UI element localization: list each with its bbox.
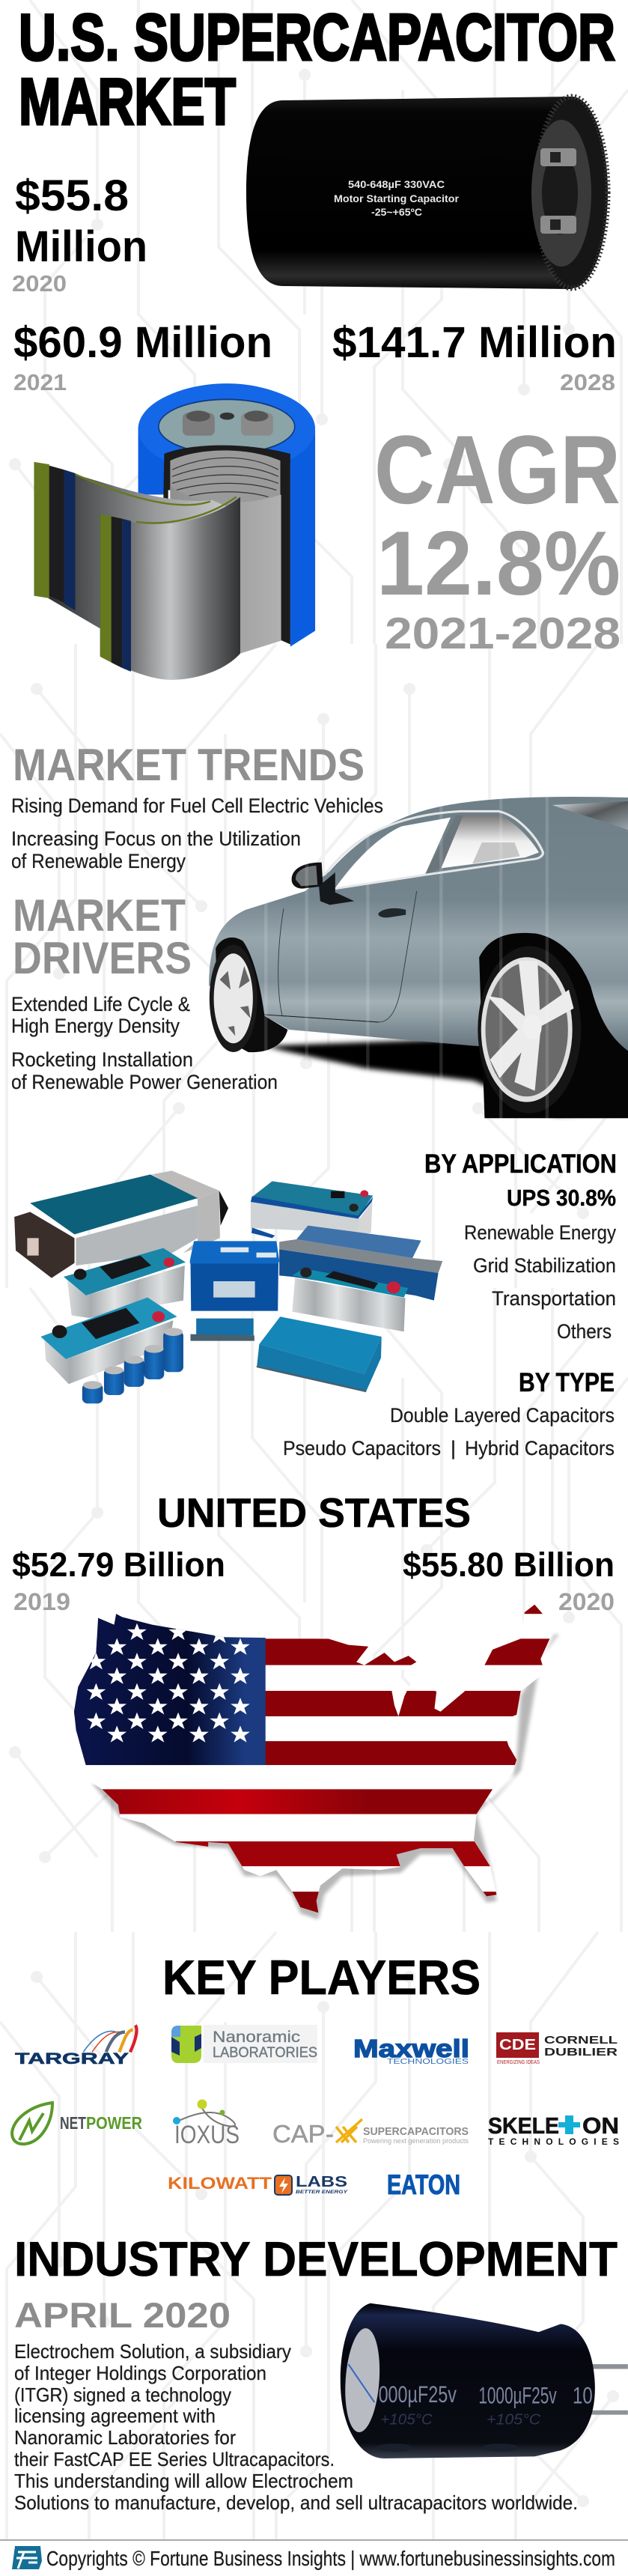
stat: 2028 value: 2028	[560, 369, 615, 395]
heading: market drivers	[13, 890, 192, 983]
stat: 2020 value	[12, 171, 147, 297]
stat: 2019 market: 2019	[13, 1588, 70, 1615]
stat: 2019 market: $52.79 Billion	[12, 1546, 225, 1584]
title: MARKET	[19, 64, 236, 139]
segment: by application: Transportation	[492, 1287, 616, 1310]
stat: 2028 value: $141.7 Million	[332, 318, 617, 367]
stat: 2020 value: $55.8	[15, 171, 129, 220]
text block: industry development: licensing agreement with	[14, 2405, 216, 2427]
list: market drivers	[11, 993, 278, 1093]
heading: market drivers: MARKET	[13, 890, 186, 941]
segment: by type: BY TYPE	[519, 1368, 615, 1397]
logo: Kilowatt Labs: KILOWATT	[168, 2174, 272, 2193]
stat: 2019 market	[12, 1546, 225, 1615]
text block: industry development: (ITGR) signed a technology	[14, 2384, 231, 2406]
capacitor markings: +105°C	[487, 2411, 541, 2428]
logo: Cornell Dubilier: DUBILIER	[544, 2046, 618, 2059]
image: grey coupe car	[209, 786, 628, 1146]
image: supercapacitor cutaway	[34, 383, 315, 680]
logo: Targray: TARGRAY	[15, 2050, 129, 2068]
stat: 2021 value: $60.9 Million	[13, 318, 272, 367]
segment: by application	[424, 1149, 617, 1343]
logo: Cornell Dubilier: CORNELL	[544, 2034, 618, 2047]
stat: 2021 value: 2021	[13, 369, 67, 395]
logo: Nanoramic Laboratories: LABORATORIES	[213, 2045, 317, 2061]
stat: 2020 market: 2020	[558, 1588, 615, 1615]
logo: Skeleton Technologies: TECHNOLOGIES	[488, 2136, 619, 2147]
list: market drivers: Rocketing Installation	[11, 1048, 193, 1071]
stat: 2021 value	[13, 318, 272, 395]
text block: industry development: Nanoramic Laboratories for	[14, 2426, 236, 2449]
text block: industry development: of Integer Holdings Corporation	[14, 2362, 266, 2384]
segment: by type: Double Layered Capacitors	[390, 1404, 615, 1427]
logo: Cornell Dubilier: ENERGIZING IDEAS	[497, 2060, 540, 2065]
logo: Kilowatt Labs: LABS	[296, 2174, 347, 2190]
capacitor markings: 10	[573, 2383, 593, 2409]
capacitor label: 540-648µF 330VAC	[348, 178, 445, 190]
logo: Ioxus	[173, 2100, 240, 2149]
text block: industry development	[14, 2340, 578, 2514]
list: market trends: of Renewable Energy	[11, 850, 186, 872]
heading: market drivers: DRIVERS	[13, 933, 192, 983]
logo: CAP-XX: CAP-	[272, 2120, 334, 2148]
list: market trends: Increasing Focus on the Utilization	[11, 827, 301, 850]
segment: by application: Grid Stabilization	[473, 1254, 616, 1277]
list: market trends: Rising Demand for Fuel Cell Electric Vehicles	[11, 795, 383, 817]
segment: by application: UPS 30.8%	[507, 1185, 616, 1211]
logo: Maxwell: Maxwell	[353, 2035, 469, 2062]
date: april 2020: APRIL 2020	[14, 2295, 231, 2335]
logo: NetPower: NET	[60, 2113, 86, 2133]
capacitor markings: 000µF25v	[379, 2381, 457, 2408]
heading: industry development: INDUSTRY DEVELOPMENT	[14, 2232, 618, 2286]
logo: NetPower: POWER	[86, 2113, 142, 2133]
heading: key players: KEY PLAYERS	[162, 1950, 481, 2005]
logo: CAP-XX: Powering next generation products	[363, 2137, 469, 2145]
heading: united states: UNITED STATES	[157, 1489, 471, 1536]
capacitor label: Motor Starting Capacitor	[334, 192, 460, 204]
logo: CAP-XX: SUPERCAPACITORS	[363, 2125, 469, 2138]
logo: Targray	[15, 2025, 136, 2068]
list: market drivers: High Energy Density	[11, 1015, 180, 1037]
list: market drivers: of Renewable Power Generation	[11, 1071, 278, 1093]
logo: Skeleton Technologies	[488, 2112, 619, 2147]
image: electrolytic capacitor	[341, 2303, 628, 2458]
segment: by type: |	[451, 1437, 456, 1459]
title	[19, 0, 615, 139]
footer logo	[12, 2546, 42, 2569]
logo: Kilowatt Labs	[168, 2174, 348, 2195]
list: market drivers: Extended Life Cycle &	[11, 993, 190, 1015]
logo: Nanoramic Laboratories	[171, 2025, 317, 2063]
stat: CAGR: 12.8%	[377, 512, 621, 614]
text block: industry development: This understanding will allow Electrochem	[14, 2470, 353, 2492]
stat: CAGR: 2021-2028	[385, 609, 621, 658]
image: black motor starting capacitor	[246, 97, 608, 289]
segment: by type: Pseudo Capacitors	[283, 1437, 441, 1459]
logos: key players	[12, 2025, 619, 2200]
list: market trends	[11, 795, 383, 872]
stat: 2028 value	[332, 318, 617, 395]
text block: industry development: their FastCAP EE Series Ultracapacitors.	[14, 2448, 335, 2470]
stat: 2020 market: $55.80 Billion	[403, 1546, 615, 1584]
image: supercapacitor modules	[14, 1170, 442, 1403]
text block: industry development: Electrochem Solution, a subsidiary	[14, 2340, 291, 2363]
text block: industry development: Solutions to manufacture, develop, and sell ultracapacitors worldwide.	[14, 2491, 578, 2514]
segment: by type: Hybrid Capacitors	[465, 1437, 615, 1459]
segment: by type	[283, 1368, 615, 1459]
logo: CAP-XX	[272, 2119, 469, 2148]
logo: Eaton: EATON	[387, 2169, 460, 2200]
heading: market trends: MARKET TRENDS	[13, 740, 365, 790]
logo: Skeleton Technologies: ON	[582, 2112, 619, 2139]
capacitor label: -25~+65ºC	[371, 206, 422, 218]
logo: Cornell Dubilier: CDE	[499, 2037, 536, 2053]
capacitor markings	[379, 2381, 593, 2428]
footer	[0, 2539, 628, 2576]
segment: by application: Others	[557, 1320, 612, 1343]
capacitor markings: 1000µF25v	[478, 2383, 557, 2409]
capacitor label	[334, 178, 460, 218]
logo: Nanoramic Laboratories: Nanoramic	[213, 2029, 300, 2046]
stat: 2020 value: 2020	[12, 270, 67, 297]
logo: Skeleton Technologies: SKELE	[488, 2112, 559, 2139]
capacitor markings: +105°C	[380, 2411, 433, 2428]
stat: 2020 market	[403, 1546, 615, 1615]
logo: NetPower	[12, 2103, 142, 2144]
stat: CAGR	[374, 415, 621, 658]
logo: Ioxus: IOXUS	[174, 2121, 240, 2149]
logo: Kilowatt Labs: BETTER ENERGY	[296, 2190, 348, 2195]
stat: 2020 value: Million	[15, 222, 147, 271]
logo: Maxwell: TECHNOLOGIES	[387, 2058, 469, 2066]
map: united states flag	[60, 1597, 573, 1919]
logo: Cornell Dubilier	[496, 2032, 618, 2065]
